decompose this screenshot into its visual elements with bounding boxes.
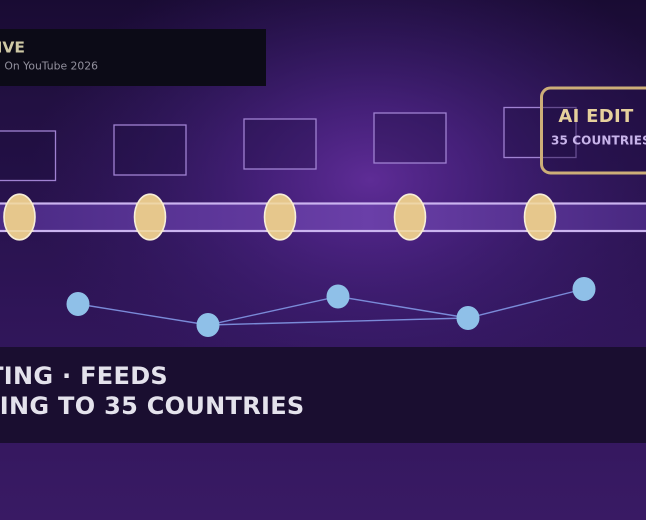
timeline markers xyxy=(4,194,556,240)
header panel xyxy=(0,29,266,86)
network line chart xyxy=(66,277,596,337)
callout title: AI EDIT xyxy=(558,106,634,127)
timeline bar xyxy=(0,204,646,231)
bar edge lines showing through markers xyxy=(5,204,554,231)
callout: AI edit xyxy=(542,88,646,173)
header subtitle: · On YouTube 2026 xyxy=(0,60,98,72)
bottom banner xyxy=(0,347,646,443)
timeline placeholder cards xyxy=(0,108,576,180)
banner line 2: ING TO 35 COUNTRIES xyxy=(0,392,304,420)
